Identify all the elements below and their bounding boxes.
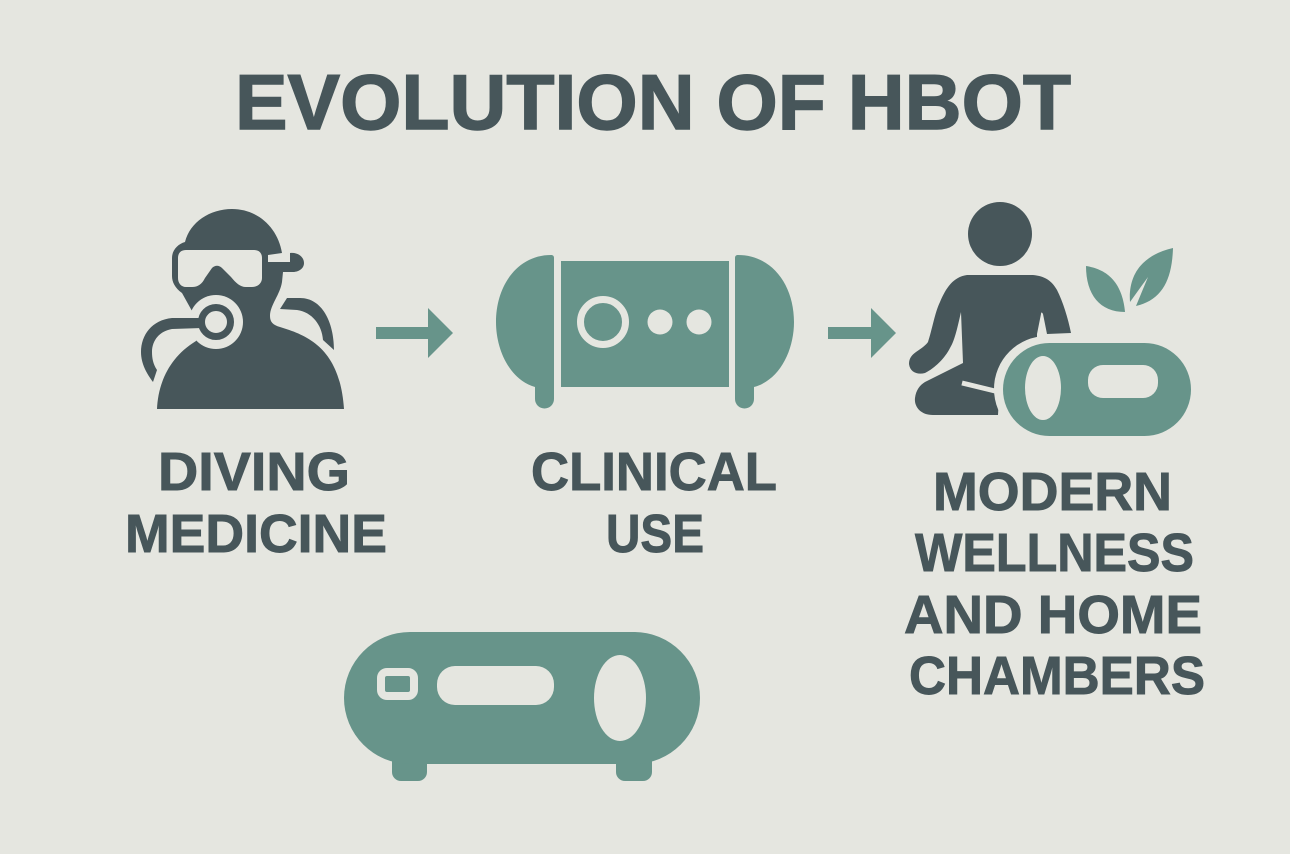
diver head and body: [157, 209, 344, 409]
icon: clinical chamber: [496, 255, 794, 408]
label: clinical use: [531, 442, 777, 564]
arrow 1: [376, 308, 453, 358]
left leaf: [1086, 266, 1125, 312]
label: diving medicine: [125, 442, 387, 564]
chamber window: [1088, 365, 1158, 398]
indicator dots: [648, 310, 672, 334]
label: modern wellness and home chambers: WELLNESS: [915, 523, 1194, 583]
window: [437, 666, 554, 705]
left hose: [141, 318, 202, 382]
gauge ring: [580, 300, 626, 344]
control panel: [381, 672, 414, 696]
right foot: [616, 745, 652, 781]
home chamber halo: [994, 336, 1198, 442]
left foot: [392, 745, 427, 781]
seated body: [909, 275, 1071, 415]
goggle lens: [178, 250, 262, 287]
label: modern wellness and home chambers: MODERN: [933, 462, 1172, 522]
label: diving medicine: DIVING: [158, 442, 350, 502]
right dome: [735, 255, 794, 408]
body: [344, 632, 700, 764]
icon: home chamber bottom: [344, 632, 700, 781]
title: EVOLUTION OF HBOT: [235, 58, 1071, 146]
right hose: [280, 298, 334, 350]
left dome: [496, 255, 554, 408]
leg gap: [962, 383, 995, 391]
label: clinical use: CLINICAL: [531, 442, 777, 502]
label: modern wellness and home chambers: CHAMBERS: [909, 646, 1205, 706]
right leaf: [1130, 248, 1173, 306]
door: [594, 655, 646, 741]
center body: [561, 261, 729, 387]
arrow 2: [828, 308, 896, 358]
label: clinical use: USE: [606, 504, 704, 564]
icon: person with leaves and home chamber: [909, 202, 1198, 442]
icon: diver: [141, 209, 344, 409]
label: modern wellness and home chambers: [904, 462, 1205, 706]
label: diving medicine: MEDICINE: [125, 504, 387, 564]
chamber door: [1025, 356, 1061, 420]
label: modern wellness and home chambers: AND HOME: [904, 585, 1202, 645]
home chamber body: [1003, 343, 1191, 436]
regulator ring: [189, 295, 243, 349]
head: [968, 202, 1032, 266]
